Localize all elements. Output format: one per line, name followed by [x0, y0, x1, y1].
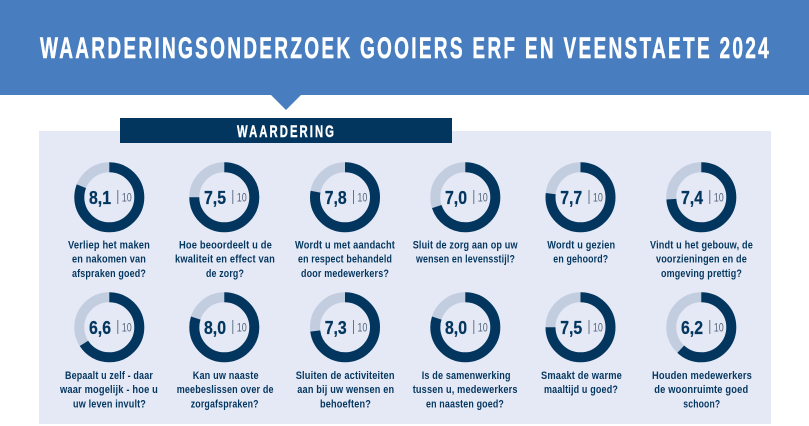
item: afspraken 8,1: [68, 167, 150, 280]
question text: Bepaalt u zelf - daar: [65, 370, 153, 382]
donut chart 8,0: [435, 297, 495, 357]
donut chart 8,0: 8,0: [445, 317, 467, 338]
question text: Vindt u het gebouw, de: [650, 240, 753, 252]
donut chart 7,4: [671, 167, 731, 227]
donut chart 8,0: 8,0: [204, 317, 226, 338]
donut chart 7,8: [315, 167, 375, 227]
item: samenwerking 8,0: [413, 297, 518, 410]
question text: Houden medewerkers: [652, 370, 752, 382]
item: zelf bepalen 6,6: [59, 297, 158, 410]
question text: [652, 370, 752, 410]
donut chart 8,1: 8,1: [89, 187, 111, 208]
item: gezien 7,7: [547, 167, 615, 266]
question text: wensen en levensstijl?: [415, 254, 515, 266]
question text: zorgafspraken?: [191, 398, 259, 410]
question text: Wordt u gezien: [547, 240, 615, 252]
section heading bar: WAARDERING: [237, 123, 336, 141]
question text: kwaliteit en effect van: [175, 254, 275, 266]
question text: [175, 240, 275, 280]
question text: maaltijd u goed?: [544, 384, 618, 396]
question text: tussen u, medewerkers: [413, 384, 518, 396]
question text: Wordt u met aandacht: [295, 240, 395, 252]
donut chart 7,5: [550, 297, 610, 357]
item: levensstijl 7,0: [413, 167, 518, 266]
question text: Verliep het maken: [68, 240, 150, 252]
question text: [295, 240, 395, 280]
donut chart 6,6: 6,6: [89, 317, 111, 338]
donut chart 6,6: [79, 297, 139, 357]
question text: omgeving prettig?: [661, 268, 742, 280]
donut chart 8,1: [79, 167, 139, 227]
donut chart 7,7: [550, 167, 610, 227]
panel: survey background: [39, 131, 771, 424]
question text: door medewerkers?: [301, 268, 389, 280]
question text: schoon?: [683, 398, 720, 410]
question text: waar mogelijk - hoe u: [59, 384, 158, 396]
question text: Is de samenwerking: [422, 370, 511, 382]
donut chart 7,4: 7,4: [681, 187, 704, 208]
donut chart 8,1: 10: [122, 192, 132, 204]
donut chart 7,5: [194, 167, 254, 227]
donut chart 7,5: 10: [593, 322, 603, 334]
donut chart 7,3: 10: [357, 322, 367, 334]
question text: de zorg?: [206, 268, 244, 280]
item: aandacht 7,8: [295, 167, 395, 280]
question text: [68, 240, 150, 280]
question text: [413, 370, 518, 410]
donut chart 6,2: [671, 297, 731, 357]
question text: [296, 370, 395, 410]
question text: en naasten goed?: [426, 398, 504, 410]
donut chart 7,0: [435, 167, 495, 227]
item: maaltijd 7,5: [541, 297, 622, 396]
question text: [59, 370, 158, 410]
donut chart 6,6: 10: [122, 322, 132, 334]
donut chart 7,0: 7,0: [445, 187, 467, 208]
donut chart 7,0: 10: [478, 192, 488, 204]
donut chart 8,0: 10: [237, 322, 247, 334]
question text: [541, 370, 622, 396]
question text: afspraken goed?: [72, 268, 146, 280]
question text: Sluit de zorg aan op uw: [413, 240, 518, 252]
question text: en nakomen van: [72, 254, 146, 266]
donut chart 7,5: 7,5: [204, 187, 226, 208]
donut chart 7,3: 7,3: [325, 317, 347, 338]
donut chart 7,4: 10: [714, 192, 724, 204]
item: activiteiten 7,3: [296, 297, 395, 410]
donut chart 7,7: 7,7: [560, 187, 582, 208]
item: kwaliteit 7,5: [175, 167, 275, 280]
question text: behoeften?: [320, 398, 371, 410]
donut chart 6,2: 10: [714, 322, 724, 334]
question text: Hoe beoordeelt u de: [179, 240, 272, 252]
question text: de woonruimte goed: [654, 384, 748, 396]
header banner: [0, 0, 809, 110]
question text: en respect behandeld: [298, 254, 392, 266]
question text: meebeslissen over de: [177, 384, 274, 396]
question text: Kan uw naaste: [193, 370, 259, 382]
item: woonruimte 6,2: [652, 297, 752, 410]
donut chart 8,0: 10: [478, 322, 488, 334]
question text: [413, 240, 518, 266]
question text: voorzieningen en de: [656, 254, 747, 266]
item: meebeslissen 8,0: [177, 297, 274, 410]
section heading bar: [120, 118, 452, 143]
donut chart 7,5: 7,5: [560, 317, 582, 338]
question text: [177, 370, 274, 410]
donut chart 7,7: 10: [593, 192, 603, 204]
question text: aan bij uw wensen en: [297, 384, 394, 396]
question text: [650, 240, 753, 280]
question text: Sluiten de activiteiten: [296, 370, 395, 382]
question text: [547, 240, 615, 266]
donut chart 7,8: 7,8: [325, 187, 347, 208]
donut chart 7,8: 10: [357, 192, 367, 204]
donut chart 6,2: 6,2: [681, 317, 703, 338]
donut chart 8,0: [194, 297, 254, 357]
question text: en gehoord?: [553, 254, 608, 266]
question text: Smaakt de warme: [541, 370, 622, 382]
item: gebouw 7,4: [650, 167, 753, 280]
donut chart 7,3: [315, 297, 375, 357]
donut chart 7,5: 10: [237, 192, 247, 204]
question text: uw leven invult?: [73, 398, 146, 410]
